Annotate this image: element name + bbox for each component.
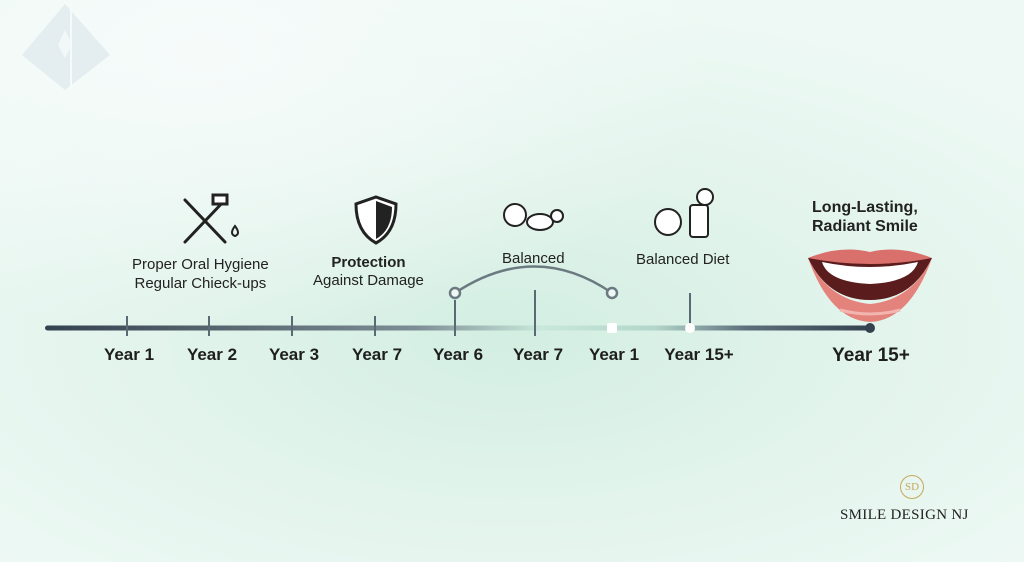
text: step 2: Protection bbox=[331, 254, 406, 271]
text: Year 3 bbox=[269, 345, 319, 364]
text: Year 1 bbox=[589, 345, 639, 364]
logo bbox=[840, 475, 969, 523]
arc bbox=[455, 266, 612, 293]
text: balanced diet: Balanced Diet bbox=[636, 251, 729, 268]
text: Year 15+ bbox=[664, 345, 734, 364]
text: Year 7 bbox=[352, 345, 402, 364]
text: Year 2 bbox=[187, 345, 237, 364]
title: smile: Long-Lasting, bbox=[812, 199, 918, 216]
icon: shield bbox=[356, 197, 396, 243]
text: step 2: Against Damage bbox=[313, 272, 424, 289]
text: Year 15+ bbox=[832, 345, 910, 366]
title: smile bbox=[812, 199, 918, 235]
title: smile: Radiant Smile bbox=[812, 218, 918, 235]
text: Year 1 bbox=[104, 345, 154, 364]
text: step 1 bbox=[132, 256, 269, 292]
icon: tomato veg bbox=[655, 189, 713, 237]
logo: SMILE DESIGN NJ bbox=[840, 507, 969, 523]
logo: SD bbox=[905, 481, 919, 493]
text: Year 7 bbox=[513, 345, 563, 364]
text: step 2 bbox=[313, 254, 424, 289]
text: step 1: Regular Chieck-ups bbox=[134, 275, 266, 292]
icon: watermark bbox=[22, 4, 110, 90]
icon: toothbrush tools bbox=[185, 195, 238, 242]
icon: smile bbox=[808, 250, 932, 322]
year labels bbox=[104, 345, 910, 366]
text: balanced: Balanced bbox=[502, 250, 565, 267]
text: Year 6 bbox=[433, 345, 483, 364]
icon: food bbox=[504, 204, 563, 230]
text: step 1: Proper Oral Hygiene bbox=[132, 256, 269, 273]
